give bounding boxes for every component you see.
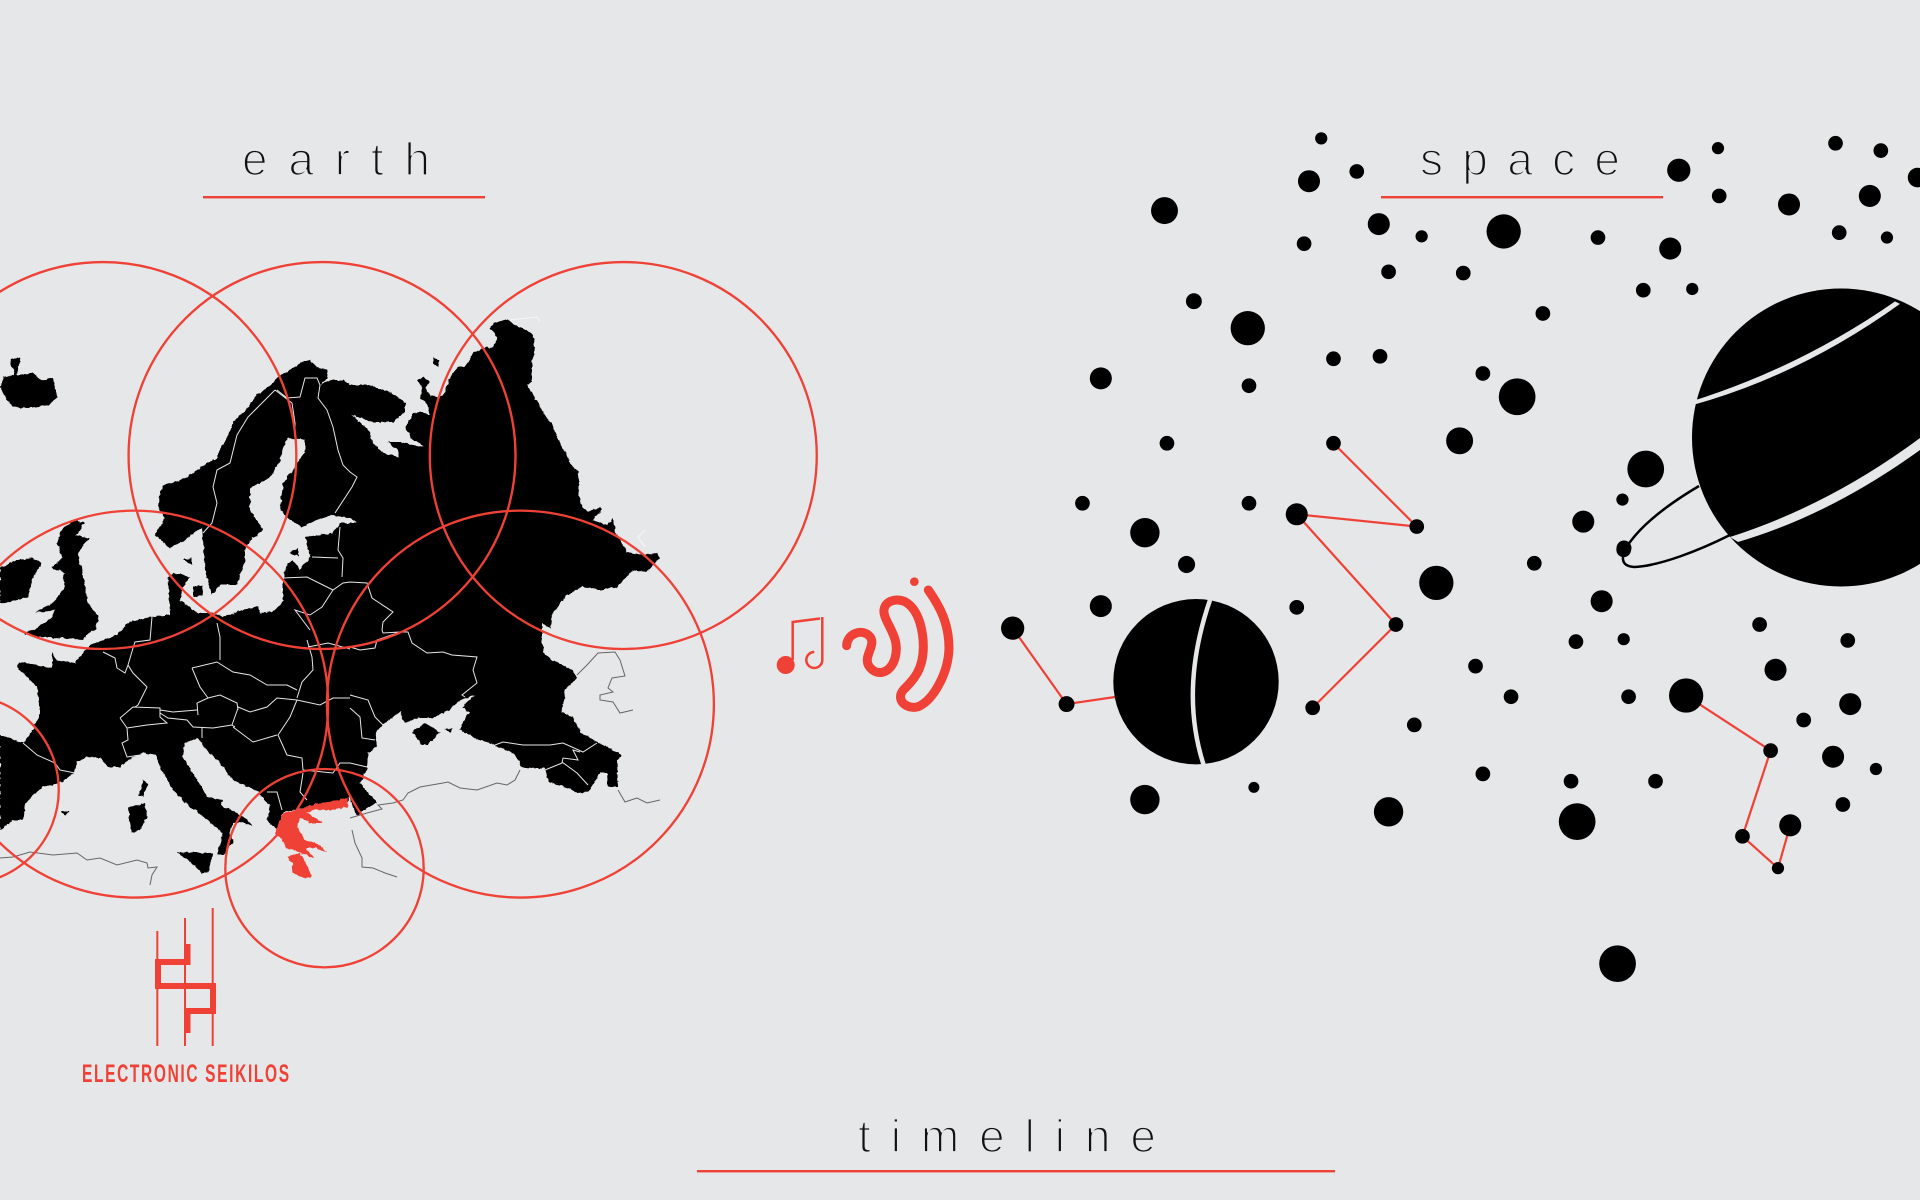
Danish islands [183,558,203,598]
Arctic island [433,358,440,367]
red coverage circles [0,262,817,967]
grey coastlines [0,652,660,885]
pale arctic marks [510,317,645,547]
Ireland [0,558,42,603]
logo wordmark: ELECTRONIC SEIKILOS [82,1060,289,1088]
stars [1001,132,1920,982]
Baltic island [290,548,298,556]
logo: Electronic Seikilos [82,908,289,1088]
map landmasses [0,319,660,873]
small planet [1113,599,1279,766]
icon: ear with sound waves [847,577,949,707]
heading: space: space [1420,133,1620,185]
Corsica [139,780,148,797]
Crimea [412,723,452,745]
Sardinia [128,803,147,833]
heading: timeline: timeline [858,1110,1156,1162]
country borders [23,317,645,810]
ringed planet [1616,288,1920,586]
panel: earth map of Europe [0,262,817,967]
panel: space star field [1001,132,1920,982]
logo mark [155,908,216,1046]
Iceland [0,357,57,408]
constellation lines [1013,443,1790,868]
Great Britain [23,520,99,640]
mainland Europe [0,319,660,855]
Balearic island [61,811,69,816]
Sicily [177,852,213,873]
heading: earth: earth [242,133,430,185]
Greece highlighted [275,798,348,878]
icon: music note [777,617,822,674]
